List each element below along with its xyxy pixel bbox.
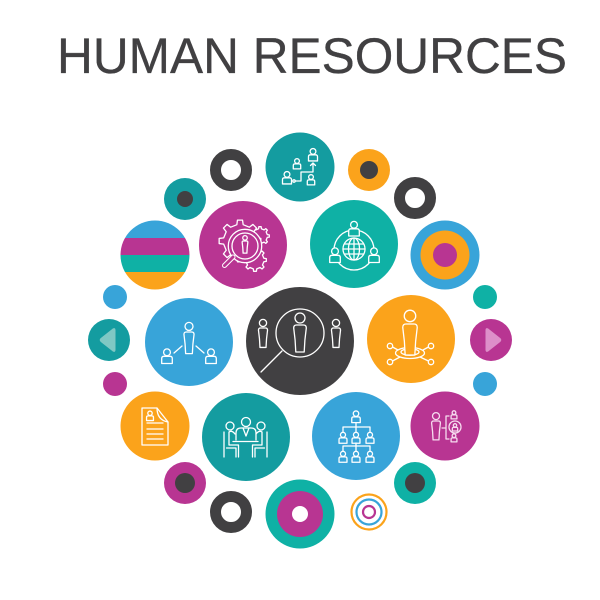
icon: magnifier over people [258,309,341,372]
concentric circle: blue orange magenta [410,220,480,290]
decorative ring: bottom left dark [216,496,246,528]
panel: influencer [367,295,455,383]
panel: resume [120,392,190,460]
small dot: blue left [103,285,127,309]
decorative dot: magenta with dark centre [164,462,206,504]
panel: search and settings [199,201,287,289]
icon: person with candidates [432,411,461,442]
right arrow button [470,319,512,361]
icon: person with network nodes [387,310,434,365]
icon: leader with two reports [162,322,216,364]
small dot: magenta left [103,372,127,396]
panel: global team [310,200,398,288]
target rings [352,494,386,530]
panel: central search [246,287,354,395]
panel: meeting [202,393,290,481]
decorative dot: teal with dark centre bottom right [394,462,436,504]
icon: CV document [142,408,168,445]
panel: career path [266,132,334,202]
panel: candidate selection [410,392,480,460]
decorative dot: teal with dark centre [164,178,206,220]
icon: globe with people [330,221,379,270]
small dot: blue right [473,372,497,396]
left arrow button [88,319,130,361]
decorative ring: top left dark [216,154,246,186]
striped circle [120,220,190,290]
decorative ring: top right dark [400,182,430,214]
title: HUMAN RESOURCES [57,28,567,84]
decorative dot: orange with dark centre [348,149,390,191]
concentric circle: bottom teal magenta white [266,480,334,548]
icon: people at table [224,418,267,457]
icon: hierarchy [339,411,374,462]
panel: org chart [312,392,400,480]
icon: gears and magnifier [219,220,269,271]
small dot: teal right [473,285,497,309]
panel: team lead [145,298,233,386]
icon: career steps [282,149,318,185]
